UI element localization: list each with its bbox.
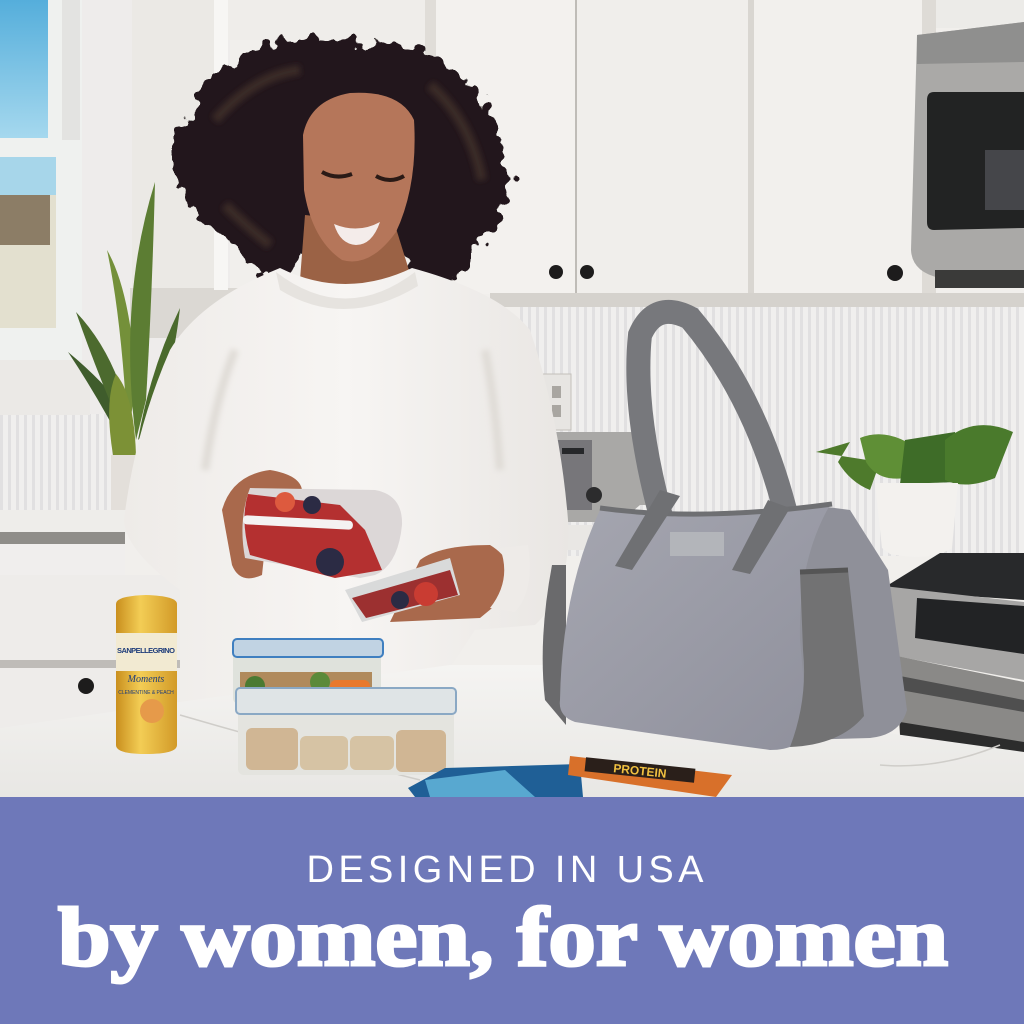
bag label bbox=[670, 532, 724, 556]
toaster bbox=[556, 432, 656, 522]
upper cabinets bbox=[132, 0, 1024, 307]
snack bars: PROTEIN bbox=[613, 761, 667, 781]
soda can bbox=[116, 595, 177, 754]
neck bbox=[300, 215, 412, 302]
potted plant bbox=[816, 425, 1013, 557]
stove bbox=[880, 553, 1024, 755]
banner subtitle: DESIGNED IN USA bbox=[306, 849, 704, 891]
window bbox=[0, 0, 90, 415]
sweater body bbox=[124, 268, 568, 702]
tilted fruit container bbox=[242, 488, 402, 578]
stacked food containers bbox=[233, 639, 456, 775]
back counter bbox=[565, 525, 595, 550]
woman bbox=[124, 38, 568, 702]
hand left bbox=[222, 470, 302, 578]
hand right bbox=[390, 545, 514, 622]
bag handle bbox=[638, 312, 785, 520]
kitchen background bbox=[0, 0, 1024, 800]
banner headline: by women, for women bbox=[58, 891, 948, 984]
lunch bag bbox=[543, 490, 907, 750]
bottom fruit container bbox=[345, 558, 460, 622]
soda can: SANPELLEGRINO bbox=[117, 646, 175, 655]
left counter and lower cabinets bbox=[0, 510, 180, 730]
face bbox=[303, 93, 415, 261]
soda can: CLEMENTINE & PEACH bbox=[118, 690, 174, 696]
front counter bbox=[0, 665, 1024, 797]
snack bars bbox=[408, 756, 732, 797]
hair bbox=[172, 38, 510, 285]
soda can: Moments bbox=[127, 674, 164, 685]
banner bbox=[0, 797, 1024, 1024]
outlet bbox=[543, 374, 571, 430]
bag straps bbox=[615, 490, 680, 570]
microwave bbox=[911, 22, 1024, 288]
snake plant bbox=[68, 182, 180, 515]
